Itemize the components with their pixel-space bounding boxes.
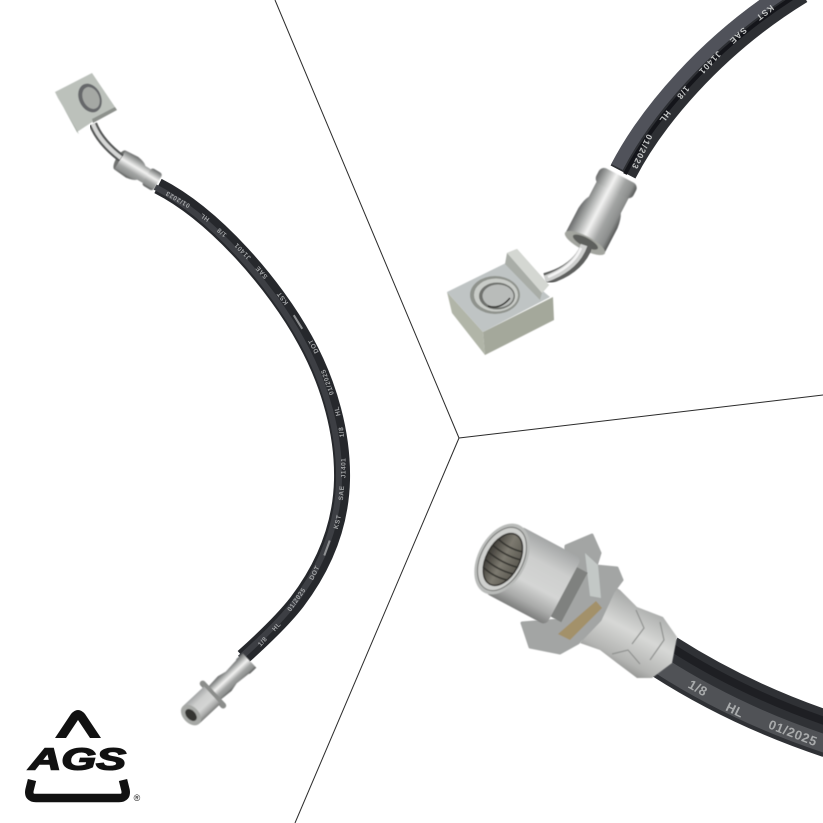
hose markings: KST <box>276 290 290 306</box>
crimp fitting <box>562 165 640 260</box>
logo bottom bracket <box>29 780 126 798</box>
hose markings lower right: HL <box>723 699 747 721</box>
banjo block large <box>447 249 554 355</box>
hose markings: 01/2023 <box>165 189 191 209</box>
hose body <box>155 186 342 658</box>
hose markings: HL <box>334 406 342 416</box>
hose markings: HL <box>199 211 211 223</box>
hose markings lower right: 1/8 <box>686 677 710 699</box>
thick hose section <box>661 647 823 744</box>
large hose section <box>617 0 802 174</box>
detail: threaded end <box>463 514 823 749</box>
small upper fitting <box>110 148 164 193</box>
hose markings: HL <box>271 621 283 633</box>
logo top chevron <box>55 710 101 738</box>
banjo block small <box>55 73 117 134</box>
hose markings: 01/2025 <box>320 368 336 396</box>
hose markings upper right: 1/8 <box>674 84 692 102</box>
retaining clip <box>522 535 622 653</box>
detail: banjo end <box>447 0 802 355</box>
hose markings upper right: SAE <box>727 25 749 47</box>
hose markings: 1/8 <box>257 636 269 648</box>
hose markings: SAE <box>338 485 346 501</box>
hose markings upper right: HL <box>657 109 673 125</box>
hose markings lower right <box>686 677 820 749</box>
hose markings upper right: J1401 <box>697 49 723 77</box>
hose markings: 1/8 <box>216 226 228 238</box>
logo wordmark: AGS <box>28 742 126 776</box>
hose markings upper right: KST <box>754 3 776 23</box>
dividing lines <box>275 0 823 823</box>
hose markings: 01/2025 <box>286 587 308 613</box>
hose markings: DOT <box>308 565 322 581</box>
AGS logo <box>28 710 141 803</box>
hose markings lower right: 01/2025 <box>766 717 820 749</box>
threaded barrel <box>463 514 592 631</box>
bent tube <box>545 245 587 279</box>
small bent tube <box>93 124 121 158</box>
hose markings: 1/8 <box>338 426 346 438</box>
hose markings upper right <box>629 3 776 171</box>
hose markings: DOT <box>307 338 321 354</box>
hose markings: J1401 <box>340 458 348 478</box>
hose markings: KST <box>333 514 343 530</box>
registered mark: ® <box>134 793 141 803</box>
hose markings upper right: 01/2023 <box>629 133 655 171</box>
full hose view <box>55 73 348 734</box>
hose markings: SAE <box>254 264 270 280</box>
hose markings: J1401 <box>233 241 253 261</box>
hose markings <box>165 189 348 648</box>
small lower fitting <box>173 647 262 734</box>
crimp taper <box>580 585 677 678</box>
